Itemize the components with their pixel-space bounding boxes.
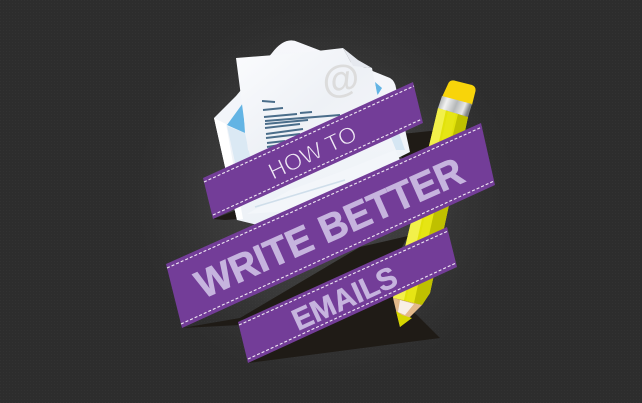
envelope front fold (247, 150, 400, 214)
icon: at sign: @ (320, 57, 362, 103)
envelope blue lining (227, 103, 245, 133)
pencil lead tip (396, 311, 412, 327)
shadows beneath ribbons (182, 130, 440, 363)
ribbon: emails (238, 227, 457, 363)
paper curled corner (343, 48, 372, 68)
heading: write better: WRITE BETTER (189, 150, 470, 307)
letter text lines (262, 101, 340, 147)
icon: pencil (393, 80, 476, 327)
heading: how to: HOW TO (264, 120, 361, 185)
letter paper (236, 48, 390, 172)
heading: emails: EMAILS (287, 261, 403, 337)
icon: envelope (214, 40, 410, 226)
pencil eraser (442, 80, 476, 105)
envelope body (214, 40, 410, 226)
ribbon: how to (203, 82, 423, 219)
ribbon: write better (166, 123, 495, 328)
pencil ferrule (438, 96, 472, 117)
pencil tip wood (393, 298, 422, 327)
pencil body (393, 108, 468, 305)
